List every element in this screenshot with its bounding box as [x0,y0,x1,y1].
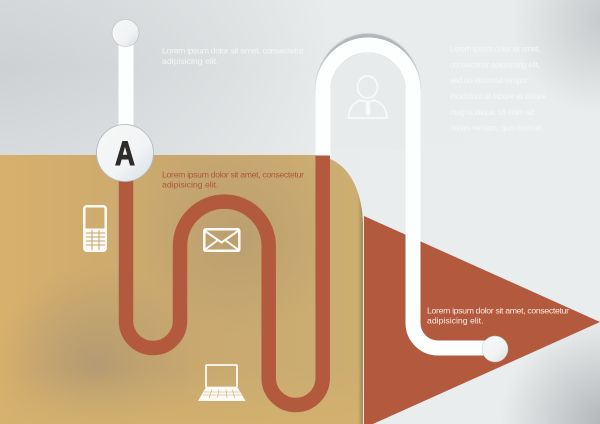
triangle arrow [364,216,600,424]
end knob [482,336,508,362]
text: faint paragraph: minim veniam, quis nostrud [450,124,542,132]
text: faint paragraph: consectetur adipisicing elit, [450,60,540,70]
text: faint paragraph: magna aliqua. Ut enim ad [450,108,534,117]
text: triangle note: adipisicing elit. [427,316,484,326]
text: top note: Lorem ipsum dolor sit amet, consectetur [162,46,304,56]
text: top note: adipisicing elit. [162,56,218,66]
icon: laptop [198,365,246,401]
text: panel note: Lorem ipsum dolor sit amet, consectetur [162,170,304,180]
A badge: A [115,135,135,173]
icon: envelope [204,229,239,251]
white path: arch and descent to end knob [323,45,495,348]
A badge [96,124,154,182]
white path shadow [316,33,420,90]
icon: mobile phone [84,206,106,251]
inner arch fill [330,53,406,150]
text: faint paragraph: Lorem ipsum dolor sit amet, [450,44,540,54]
icon: businessman [348,76,387,118]
text: faint paragraph: sed do eiusmod tempor [450,76,528,85]
rust serpentine path [126,156,323,405]
text: panel note: adipisicing elit. [162,180,218,190]
text: faint paragraph: incididunt ut labore et dolore [450,92,546,101]
start knob [112,20,139,46]
text: triangle note: Lorem ipsum dolor sit amet, consectetur [427,306,569,316]
panel: tan area [0,155,363,424]
white path: top stem [118,40,134,130]
